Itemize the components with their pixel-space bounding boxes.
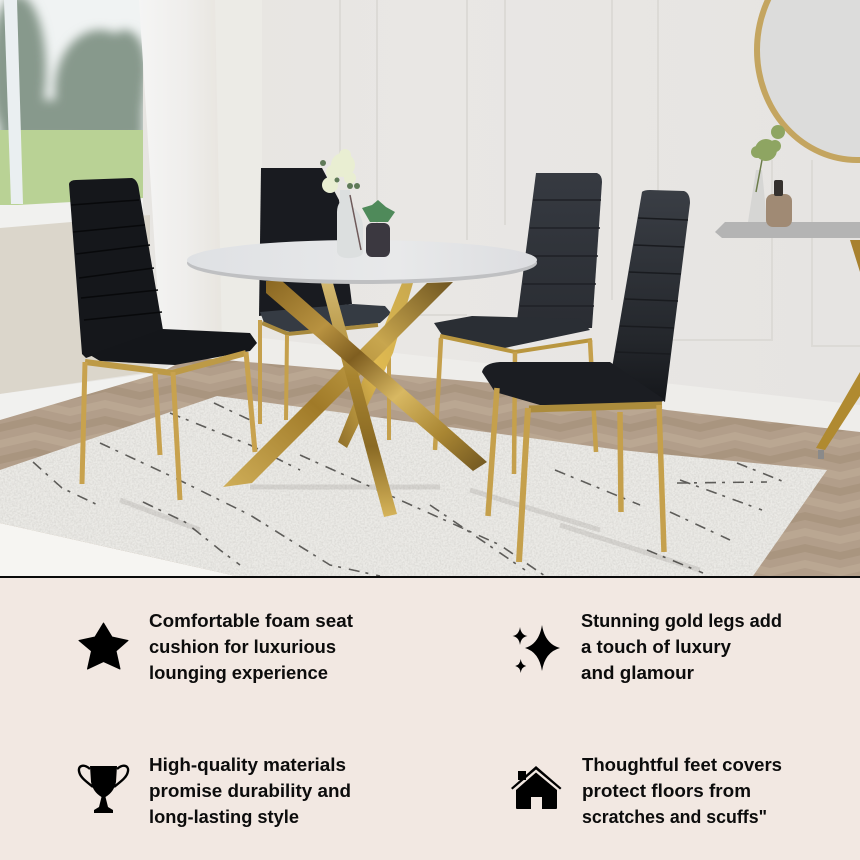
text: foam seat: lounging experience [149, 663, 328, 683]
text: foam seat: cushion for luxurious [149, 637, 336, 657]
left wall [0, 215, 150, 394]
window with view outside [0, 0, 147, 228]
mirror [757, 0, 860, 160]
icon: trophy [79, 766, 128, 813]
skirting left and right [0, 345, 200, 420]
text: gold legs: a touch of luxury [581, 637, 731, 657]
photo: dining room scene [0, 0, 860, 576]
text: materials: promise durability and [149, 781, 351, 801]
chair: front right [482, 190, 690, 562]
curtain [139, 0, 222, 330]
rug [0, 390, 830, 576]
divider line [0, 576, 860, 578]
pale floor bottom left [0, 523, 236, 576]
chair: left front [69, 178, 257, 500]
chair: far back right [434, 173, 602, 474]
text: materials: long-lasting style [149, 807, 299, 827]
console table with vase [715, 125, 860, 459]
panel: features background [0, 578, 860, 860]
text: gold legs: and glamour [581, 663, 694, 683]
text: gold legs [581, 611, 782, 683]
text: materials [149, 755, 351, 827]
text: gold legs: Stunning gold legs add [581, 611, 782, 631]
text: feet covers [582, 755, 782, 827]
text: feet covers: scratches and scuffs" [582, 807, 767, 827]
text: foam seat: Comfortable foam seat [149, 611, 353, 631]
text: feet covers: protect floors from [582, 781, 751, 801]
floor [0, 357, 860, 576]
icon: house [511, 766, 562, 809]
icon: star [79, 623, 128, 669]
vases with flowers [320, 149, 395, 258]
wall panel mouldings [256, 0, 860, 346]
text: feet covers: Thoughtful feet covers [582, 755, 782, 775]
text: materials: High-quality materials [149, 755, 346, 775]
text: foam seat [149, 611, 353, 683]
chair: far back left [259, 168, 391, 440]
table: gold crossed legs [187, 240, 537, 517]
icon: sparkles [512, 625, 560, 673]
